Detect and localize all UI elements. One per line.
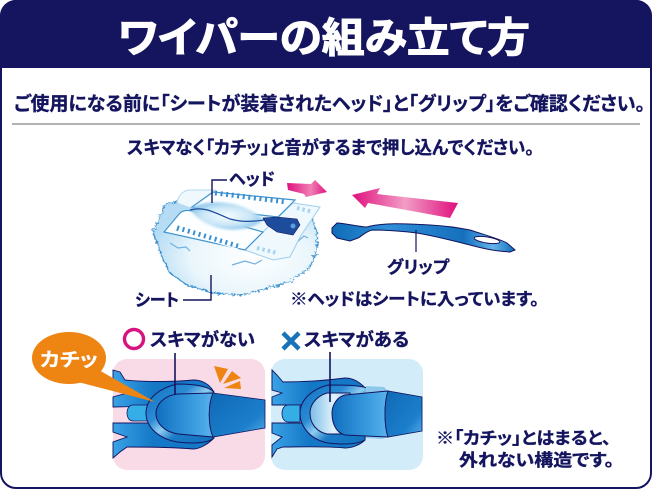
icon: lower prong bbox=[272, 423, 365, 457]
icon: small tab bbox=[282, 405, 300, 422]
icon: click burst bbox=[214, 366, 241, 389]
heading: no gap: スキマがない bbox=[150, 329, 255, 350]
label: シート bbox=[135, 275, 211, 310]
note: click explanation bbox=[436, 429, 614, 470]
icon: grip body bbox=[385, 391, 422, 437]
icon: lower prong bbox=[113, 423, 214, 458]
icon: grip end bbox=[156, 393, 213, 437]
label: ヘッド: ヘッド bbox=[229, 170, 275, 189]
intro sentence: ご使用になる前に「シートが装着されたヘッド」と「グリップ」をご確認ください。 bbox=[14, 92, 645, 115]
label: シート: シート bbox=[135, 291, 179, 310]
icon: front plate bbox=[164, 210, 263, 250]
title: ワイパーの組み立て方 bbox=[118, 15, 530, 61]
label: グリップ bbox=[387, 230, 450, 277]
callout: click bbox=[32, 332, 155, 402]
icon: ring bbox=[300, 385, 367, 444]
icon: transparent right plate bbox=[245, 203, 320, 260]
instruction sentence: スキマなく「カチッ」と音がするまで押し込んでください。 bbox=[127, 137, 534, 158]
icon: ring bbox=[146, 384, 214, 443]
title banner bbox=[0, 0, 652, 68]
icon: upper prong bbox=[113, 370, 214, 407]
illustration: head with sheet bbox=[153, 190, 320, 295]
note: head inside sheet: ※ヘッドはシートに入っています。 bbox=[290, 290, 539, 309]
panel: no gap bbox=[113, 329, 265, 470]
note: click explanation: ※「カチッ」とはまると、 bbox=[436, 429, 611, 448]
icon: small pink arrow bbox=[287, 180, 327, 197]
icon: head dome bbox=[190, 202, 263, 230]
icon: upper prong bbox=[272, 370, 367, 405]
icon: gap bbox=[310, 393, 350, 434]
panel: with gap bbox=[271, 329, 423, 470]
heading: with gap: スキマがある bbox=[304, 329, 409, 350]
label: グリップ: グリップ bbox=[387, 257, 450, 277]
icon: small tab bbox=[127, 405, 148, 421]
icon: fluffy sheet bbox=[153, 195, 317, 295]
note: click explanation: 外れない構造です。 bbox=[459, 451, 614, 470]
icon: transparent left tab bbox=[177, 190, 215, 208]
icon: grip body bbox=[209, 393, 265, 437]
icon: large pink arrow bbox=[352, 188, 458, 218]
callout: click: カチッ bbox=[40, 350, 98, 371]
icon: highlight behind grip bbox=[366, 386, 388, 439]
label: ヘッド bbox=[212, 170, 275, 203]
icon: head socket bbox=[263, 217, 300, 235]
leader line bbox=[329, 352, 331, 402]
leader line bbox=[174, 353, 176, 395]
icon: back plate bbox=[192, 192, 295, 217]
icon: fur marks bbox=[170, 236, 308, 265]
icon: grip bbox=[332, 223, 515, 252]
icon: grip end bbox=[332, 391, 388, 437]
